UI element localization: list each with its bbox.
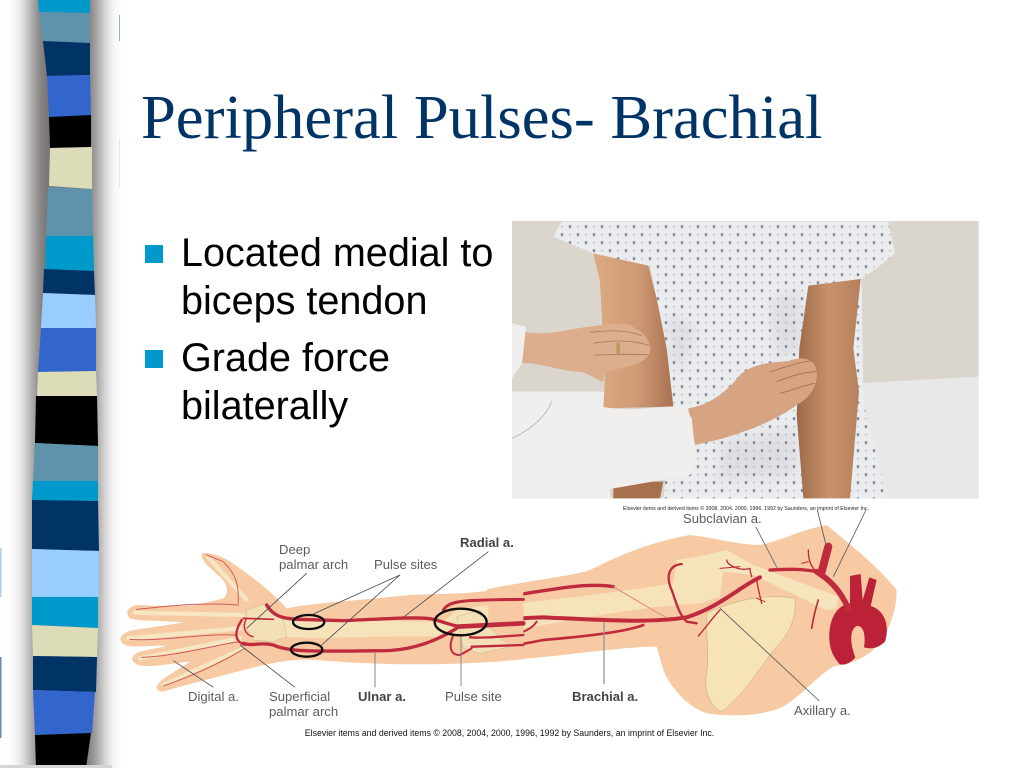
label: digital artery: Digital a.	[188, 689, 239, 704]
pulse site: antecubital ring	[435, 609, 487, 635]
arm anatomy illustration	[120, 510, 897, 715]
label: ulnar artery: Ulnar a.	[358, 689, 406, 704]
illustration labels	[188, 511, 851, 719]
label: superficial palmar arch: Superficial	[269, 689, 330, 704]
bed sheet	[857, 377, 979, 498]
wall	[512, 221, 979, 498]
label leader lines	[604, 510, 866, 701]
humerus bone	[487, 555, 723, 635]
label: radial artery: Radial a.	[460, 535, 514, 550]
patient's left arm	[593, 253, 673, 408]
bullet: Grade force bilaterally: bilaterally	[181, 384, 348, 428]
label: brachial artery: Brachial a.	[572, 689, 638, 704]
label leader lines	[173, 552, 488, 687]
label: axillary artery: Axillary a.	[794, 703, 851, 718]
decorative patterned vertical strip	[32, 0, 99, 768]
examiner's upper hand	[522, 324, 650, 382]
bullet: Located medial to biceps tendon	[145, 231, 493, 323]
subclavian and axillary arteries	[487, 547, 848, 647]
photo: examiner palpating brachial pulses	[512, 221, 979, 498]
radial, ulnar and palmar arteries	[130, 555, 523, 686]
decorative strip shadow	[30, 0, 100, 768]
wrist carpal bones	[245, 603, 287, 642]
pulse site: ulnar wrist ring	[291, 643, 322, 657]
elbow bones	[457, 610, 510, 653]
label: pulse site: Pulse site	[445, 689, 502, 704]
hospital gown	[553, 222, 895, 498]
bullet: Grade force bilaterally	[145, 336, 390, 428]
label: superficial palmar arch: palmar arch	[269, 704, 338, 719]
aortic arch	[829, 574, 887, 665]
label: deep palmar arch: palmar arch	[279, 557, 348, 572]
examiner's lower hand and forearm	[688, 358, 817, 445]
body silhouette: shoulder and chest	[487, 510, 897, 715]
clavicle bone	[707, 550, 838, 610]
pulse site: radial wrist ring	[293, 615, 324, 629]
photo copyright caption: Elsevier items and derived items © 2008, 2004, 2000, 1996, 1992 by Saunders, an imprint of Elsevier Inc.	[623, 505, 869, 512]
wedding ring	[616, 343, 620, 355]
scapula bone	[706, 597, 795, 712]
forearm and hand	[120, 552, 523, 692]
bullet list	[145, 231, 493, 428]
title: Peripheral Pulses- Brachial	[141, 82, 822, 152]
label: deep palmar arch: Deep	[279, 542, 310, 557]
bullet: Grade force bilaterally: Grade force	[181, 336, 390, 380]
forearm bones	[280, 605, 488, 638]
patient's right arm	[797, 279, 861, 498]
label: pulse sites: Pulse sites	[374, 557, 438, 572]
bullet: Located medial to biceps tendon: Located medial to	[181, 231, 493, 275]
illustration copyright caption: Elsevier items and derived items © 2008, 2004, 2000, 1996, 1992 by Saunders, an imprint of Elsevier Inc.	[305, 728, 714, 738]
bullet: Located medial to biceps tendon: biceps tendon	[181, 279, 427, 323]
hand bones	[128, 557, 247, 685]
examiner's white coat	[512, 323, 697, 492]
label: subclavian artery: Subclavian a.	[683, 511, 762, 526]
gown fold shadows	[667, 288, 803, 482]
decorative edge marks	[0, 15, 120, 768]
